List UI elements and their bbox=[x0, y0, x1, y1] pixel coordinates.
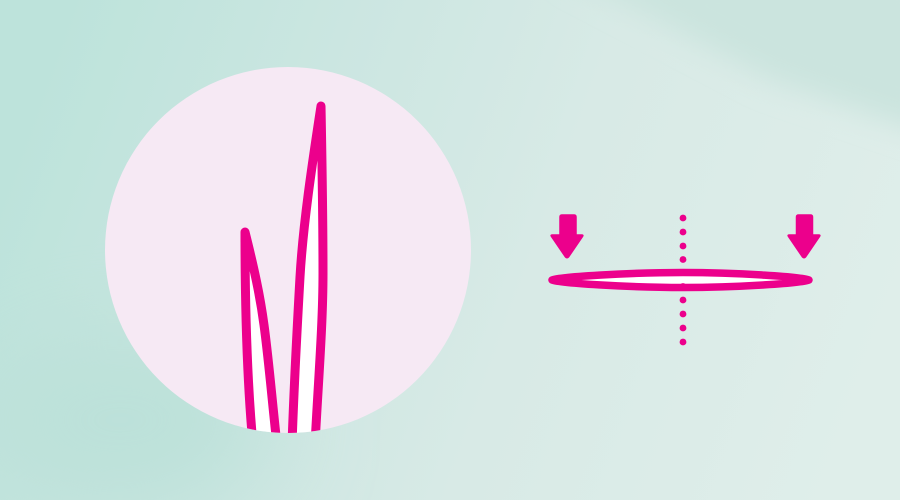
icon: left down arrow bbox=[551, 215, 583, 258]
left blade bbox=[245, 232, 277, 445]
right blade bbox=[292, 106, 323, 445]
icon: dotted fold line bbox=[680, 215, 686, 345]
icon: right down arrow bbox=[788, 215, 820, 258]
icon: flattened blade bbox=[552, 272, 809, 290]
icon: upright blades bbox=[245, 106, 323, 445]
panel: magnified circle bbox=[105, 67, 471, 445]
